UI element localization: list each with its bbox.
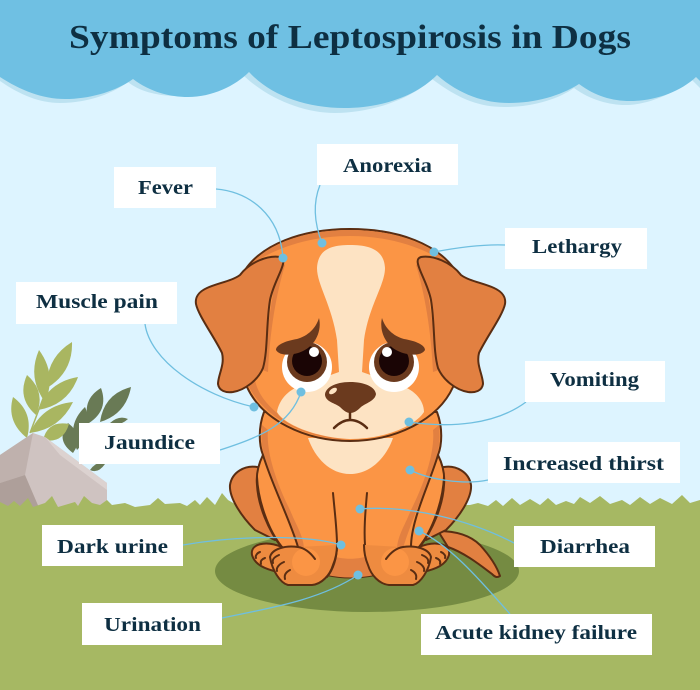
leader lines	[145, 185, 526, 618]
label: Muscle pain: Muscle pain	[36, 291, 158, 313]
dog hind leg left	[230, 467, 275, 540]
ground shadow	[215, 530, 519, 612]
symptom dots	[250, 238, 438, 580]
label: Diarrhea	[514, 526, 655, 567]
dog leg lines	[257, 455, 444, 577]
label: Dark urine	[42, 525, 183, 566]
label: Jaundice	[79, 423, 220, 464]
label: Increased thirst: Increased thirst	[503, 453, 664, 475]
label: Urination: Urination	[104, 614, 201, 636]
label: Muscle pain	[16, 282, 177, 324]
label: Jaundice: Jaundice	[104, 432, 195, 454]
dog left paws	[252, 544, 337, 585]
plant: light leaves	[11, 342, 78, 441]
dog head	[235, 229, 465, 441]
label: Dark urine: Dark urine	[57, 536, 168, 558]
dog right paws	[364, 544, 449, 585]
label: Diarrhea: Diarrhea	[540, 536, 630, 558]
left eye	[282, 342, 332, 392]
left eyebrow	[276, 318, 320, 355]
label: Fever: Fever	[138, 177, 193, 199]
right eye	[369, 342, 419, 392]
label: Anorexia	[317, 144, 458, 185]
right eyebrow	[381, 318, 425, 355]
dog	[196, 229, 505, 585]
head shading	[248, 230, 450, 440]
left ear	[196, 257, 283, 392]
dog hind leg right	[426, 467, 471, 540]
mouth	[334, 413, 367, 428]
label: Lethargy: Lethargy	[532, 236, 622, 258]
label: Vomiting: Vomiting	[550, 369, 639, 391]
nose	[325, 382, 376, 413]
rock	[0, 433, 107, 510]
dog body	[257, 412, 444, 578]
grass ground	[0, 493, 700, 690]
head blaze and muzzle	[277, 245, 424, 439]
label: Increased thirst	[488, 442, 680, 483]
plant: dark leaves	[63, 387, 131, 471]
right ear	[418, 257, 505, 392]
label: Vomiting	[525, 361, 665, 402]
header cloud banner	[0, 0, 700, 113]
label: Acute kidney failure: Acute kidney failure	[435, 622, 637, 644]
dog chest patch	[308, 438, 393, 474]
label: Acute kidney failure	[421, 614, 652, 655]
label: Lethargy	[505, 228, 647, 269]
label: Fever	[114, 167, 216, 208]
label: Urination	[82, 603, 222, 645]
dog body shading	[261, 425, 440, 578]
title: Symptoms of Leptospirosis in Dogs	[69, 19, 631, 56]
dog tail	[438, 531, 500, 577]
label: Anorexia: Anorexia	[343, 155, 432, 177]
